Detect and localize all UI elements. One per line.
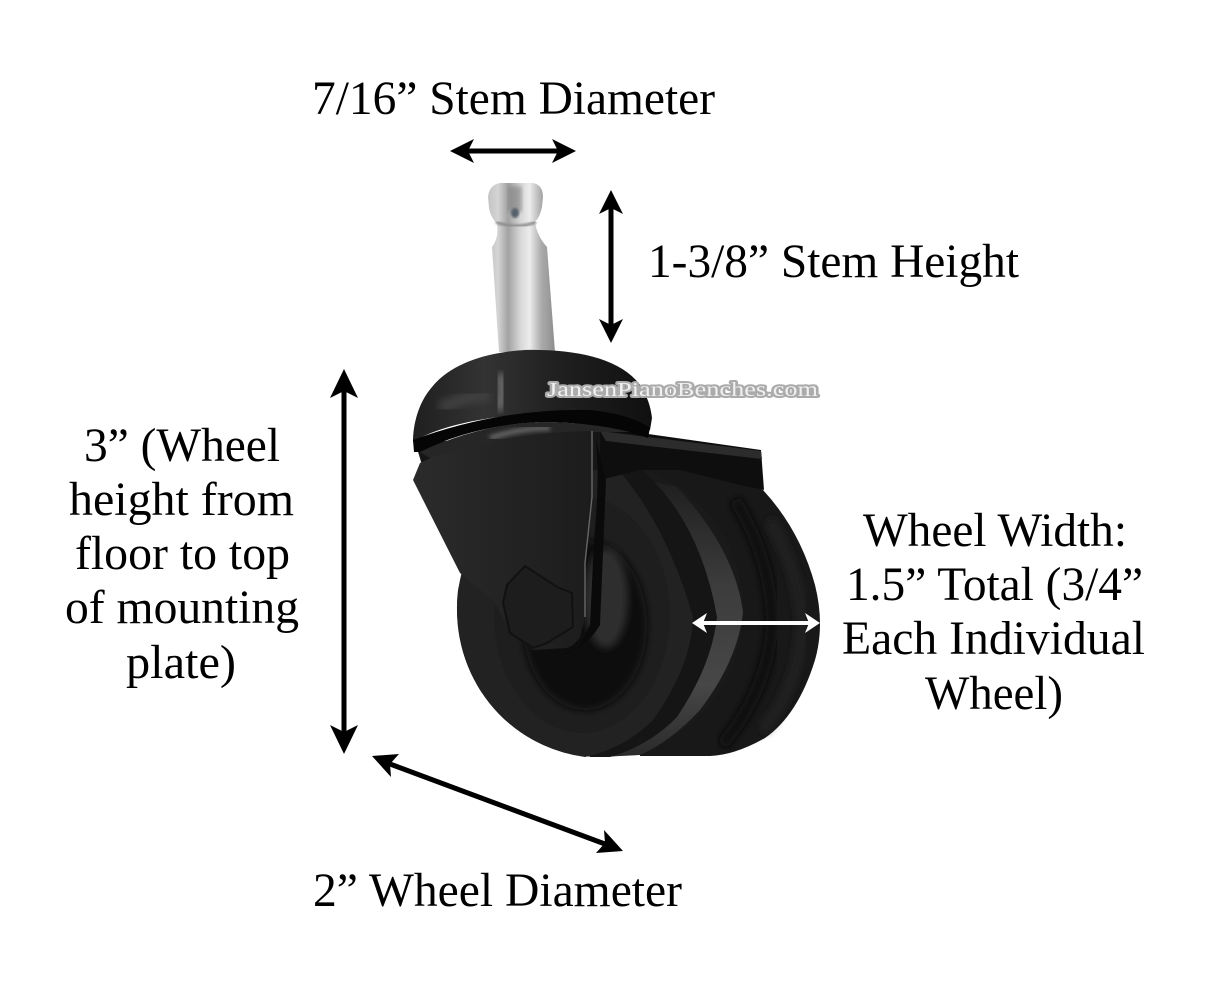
plastic hub <box>413 350 652 475</box>
label: wheel width: Wheel) <box>925 667 1063 720</box>
arrow: wheel height <box>330 369 358 754</box>
arrow: stem diameter <box>450 139 576 163</box>
label: wheel height: of mounting <box>65 581 299 634</box>
label: wheel height: plate) <box>126 636 236 689</box>
arrow: wheel diameter <box>372 754 623 853</box>
hex bolt <box>503 566 573 648</box>
arrow: wheel width <box>692 613 820 633</box>
top plate <box>590 428 764 490</box>
rear wheel <box>640 440 820 756</box>
label: wheel height: floor to top <box>75 527 290 580</box>
arrow: stem height <box>599 190 623 343</box>
caster photo <box>413 183 820 757</box>
label: wheel height <box>65 419 299 689</box>
front wheel <box>457 460 743 757</box>
label: wheel width: 1.5” Total (3/4” <box>846 558 1143 611</box>
label: wheel width <box>842 504 1145 720</box>
label: wheel height: height from <box>69 473 294 526</box>
side bracket <box>413 431 606 655</box>
watermark: JansenPianoBenches.com <box>547 379 819 401</box>
label: wheel width: Each Individual <box>842 612 1145 665</box>
label: wheel height: 3” (Wheel <box>84 419 280 472</box>
label: wheel diameter: 2” Wheel Diameter <box>313 864 682 917</box>
label: wheel width: Wheel Width: <box>863 504 1127 557</box>
metal stem <box>488 183 555 352</box>
label: stem diameter: 7/16” Stem Diameter <box>312 72 715 125</box>
label: stem height: 1-3/8” Stem Height <box>648 235 1020 288</box>
